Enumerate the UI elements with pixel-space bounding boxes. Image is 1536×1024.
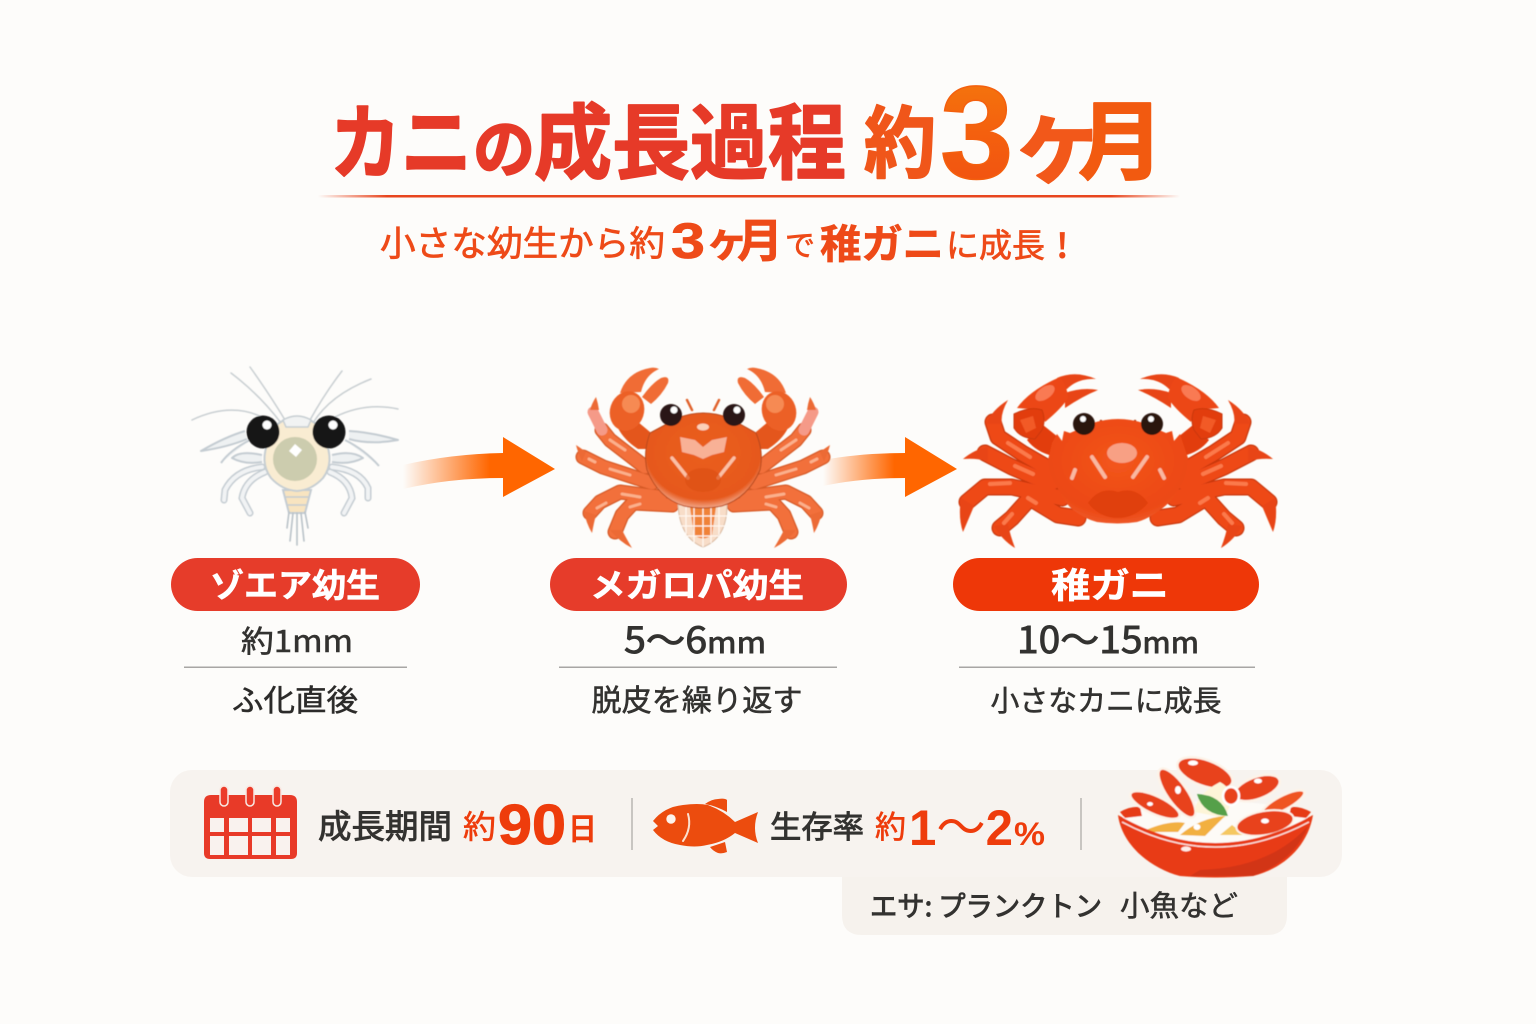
icon: calendar	[204, 786, 297, 859]
title	[330, 59, 1164, 206]
title: カニ	[330, 77, 472, 196]
stage: megalopa larva	[550, 558, 847, 720]
subtitle: に成長	[946, 219, 1045, 267]
stage: zoea larva	[171, 558, 420, 720]
stage name pill: megalopa: メガロパ幼生	[590, 559, 804, 607]
stage: juvenile crab	[953, 558, 1259, 720]
food note	[870, 883, 1238, 925]
subtitle: で	[785, 221, 815, 265]
stage name pill: juvenile: 稚ガニ	[1051, 558, 1169, 609]
size: megalopa: 5〜6mm	[624, 612, 766, 664]
subtitle: !	[1056, 219, 1069, 268]
panel: food	[842, 877, 1287, 935]
note: megalopa: 脱皮を繰り返す	[592, 676, 802, 720]
title: 成長過程	[534, 77, 846, 196]
stage name pill: zoea: ゾエア幼生	[210, 559, 380, 607]
title: の	[473, 99, 535, 191]
stage name pill: juvenile	[953, 558, 1259, 611]
stat: growth period: 日	[568, 804, 597, 849]
subtitle: ヶ	[706, 208, 748, 269]
icon: food bowl	[1118, 751, 1313, 878]
stat: survival rate: 約	[875, 802, 906, 847]
title: 3	[940, 59, 1013, 206]
subtitle: 稚ガニ	[820, 212, 944, 270]
panel: growth stats	[170, 770, 1342, 877]
stat: growth period	[318, 793, 597, 857]
stat: survival rate: %	[1014, 816, 1045, 852]
icon: zoea larva	[192, 367, 398, 545]
subtitle	[380, 205, 1069, 271]
subtitle: 月	[737, 205, 783, 271]
title: 月	[1078, 72, 1164, 197]
subtitle: 3	[671, 213, 705, 269]
stat: survival rate: 1〜2	[909, 800, 1013, 856]
stat: survival rate: 生存率	[770, 802, 864, 847]
note: juvenile: 小さなカニに成長	[990, 678, 1222, 720]
icon: megalopa crab	[576, 368, 830, 548]
size: zoea: 約1mm	[241, 617, 353, 661]
stat: survival rate	[770, 800, 1045, 856]
arrow: zoea to megalopa	[403, 437, 555, 497]
food note: エサ: プランクトン	[870, 885, 1102, 925]
stat: growth period: 約	[463, 802, 496, 848]
stage name pill: megalopa	[550, 558, 847, 611]
note: zoea: ふ化直後	[232, 676, 358, 720]
food note: 小魚など	[1120, 883, 1238, 925]
title underline	[318, 195, 1180, 198]
title: ヶ	[1012, 68, 1104, 201]
icon: fish	[653, 799, 758, 853]
stat: growth period: 90	[498, 793, 566, 857]
stat: growth period: 成長期間	[318, 800, 452, 848]
icon: juvenile crab	[960, 374, 1276, 548]
subtitle: 小さな幼生から約	[380, 216, 665, 267]
arrow: megalopa to juvenile crab	[823, 437, 957, 497]
stage name pill: zoea	[171, 558, 420, 611]
title: 約	[864, 82, 936, 194]
size: juvenile: 10〜15mm	[1017, 610, 1199, 664]
